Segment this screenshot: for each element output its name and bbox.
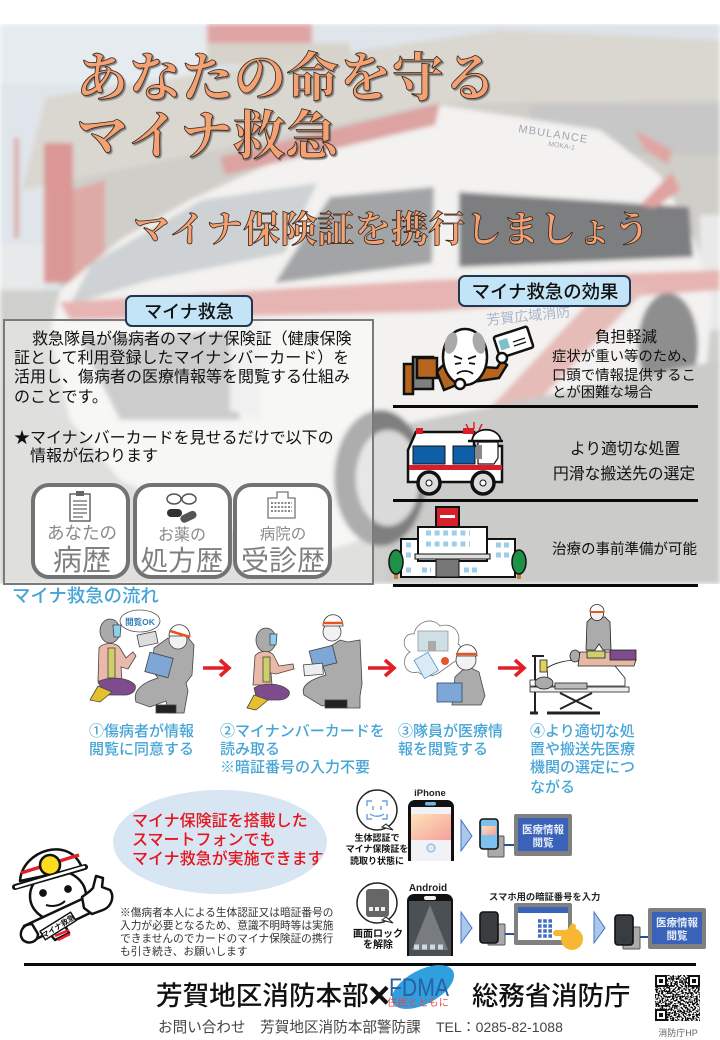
title: マイナ救急: [76, 108, 341, 166]
panel: マイナ救急: [4, 296, 373, 584]
effect 3 text: 治療の事前準備が可能: [552, 541, 697, 558]
effect 2 text: より適切な処置: [570, 440, 680, 458]
card: visit history: [235, 485, 330, 577]
caption 2: ※暗証番号の入力不要: [220, 759, 370, 776]
caption 2: [220, 723, 385, 776]
note text: も引き続き、お願いします: [120, 945, 248, 958]
caption 1: 閲覧に同意する: [89, 741, 194, 758]
description text: 救急隊員が傷病者のマイナ保険証（健康保険: [32, 329, 352, 348]
effects heading: [459, 276, 630, 306]
tablet: medical info: [648, 908, 706, 949]
biometric text: [346, 832, 408, 866]
reader and phone: [480, 819, 514, 857]
tablet: medical info: 医療情報: [656, 916, 698, 929]
chevron: [594, 912, 605, 943]
step 1 illustration: 閲覧OK: [125, 617, 156, 627]
card: prescription history: 処方歴: [141, 545, 223, 576]
effect 1 text: 症状が重い等のため、: [552, 347, 696, 365]
icon: pointing hand: [553, 923, 583, 950]
biometric text: 読取り状態に: [350, 855, 404, 866]
description text: 証として利用登録したマイナンバーカード）を: [14, 349, 349, 367]
card: medical history: 病歴: [53, 544, 111, 577]
effect 1 text: 口頭で情報提供するこ: [552, 367, 696, 384]
arrow 2: [368, 660, 394, 676]
biometric text: 生体認証で: [354, 832, 400, 843]
icon: hospital: [389, 507, 526, 579]
title: [76, 50, 497, 166]
step 3 illustration: [404, 621, 485, 705]
caption 1: ①傷病者が情報: [89, 722, 194, 740]
title: あなたの命を守る: [76, 50, 497, 108]
step 2 illustration: [247, 615, 362, 710]
note text: ※傷病者本人による生体認証又は暗証番号の: [120, 906, 333, 919]
card: medical history: [33, 485, 128, 577]
callout: smartphone notice: マイナ保険証を搭載した: [132, 812, 308, 830]
icon: ambulance with rescuer: [408, 422, 503, 494]
text: 消防庁HP: [658, 1027, 698, 1038]
icon: mascot firefighter: マイナ救急: [40, 912, 77, 940]
tablet: medical info: [514, 814, 572, 856]
logo: FDMA: 住民とともに: [387, 996, 449, 1009]
step 4 illustration: [530, 604, 636, 714]
unlock text: 画面ロック: [353, 928, 403, 940]
unlock text: [353, 928, 403, 951]
card: visit history: 病院の: [260, 525, 306, 543]
callout: smartphone notice: スマートフォンでも: [132, 831, 276, 849]
caption 1: [89, 722, 194, 758]
reader and phone: [615, 915, 648, 949]
logo: FDMA: FDMA: [389, 974, 449, 1002]
tablet: PIN entry: [514, 903, 572, 945]
photo lettering: ambulance: MOKA-1: [548, 141, 575, 152]
panel heading: [126, 296, 252, 326]
footer organisations: [156, 956, 630, 1018]
caption 2: ②マイナンバーカードを: [220, 723, 385, 740]
description text: 情報が伝わります: [30, 447, 158, 465]
effects heading: マイナ救急の効果: [472, 281, 618, 302]
footer organisations: ×: [368, 975, 390, 1017]
chevron: [461, 912, 472, 943]
panel: マイナ救急の効果: [389, 276, 698, 587]
heading: flow: マイナ救急の流れ: [12, 585, 159, 606]
card: prescription history: [135, 485, 230, 577]
panel heading: マイナ救急: [144, 302, 234, 322]
iPhone procedure: iPhone: [414, 788, 446, 799]
Android procedure: [353, 883, 706, 956]
description text: ★マイナンバーカードを見せるだけで以下の: [14, 429, 334, 447]
iPhone: [408, 800, 454, 861]
effect 1 text: 負担軽減: [595, 328, 657, 346]
caption 4: ながる: [530, 778, 575, 796]
icon: elderly patient with card: [404, 326, 534, 394]
Android procedure: スマホ用の暗証番号を入力: [489, 891, 600, 902]
step 1 illustration: [90, 610, 194, 713]
biometric text: マイナ保険証を: [346, 843, 408, 854]
contact line: お問い合わせ 芳賀地区消防本部警防課: [158, 1019, 421, 1036]
step captions: [89, 722, 635, 796]
unlock text: を解除: [363, 938, 393, 951]
arrow 3: [498, 660, 524, 676]
caption 4: 機関の選定につ: [530, 759, 635, 776]
QR code: [654, 974, 701, 1022]
caption 3: [398, 722, 503, 758]
caption 3: 報を閲覧する: [398, 741, 488, 758]
chevron: [461, 820, 472, 851]
card: visit history: 受診歴: [241, 545, 325, 576]
card: prescription history: お薬の: [158, 526, 206, 544]
callout: smartphone notice: マイナ救急が実施できます: [132, 849, 324, 868]
icon: unlock bubble: [357, 883, 397, 923]
tablet: medical info: 閲覧: [666, 929, 688, 942]
icon: mascot firefighter: [15, 849, 112, 942]
note text: [120, 906, 334, 958]
effect 2 text: 円滑な搬送先の選定: [553, 465, 695, 483]
subtitle: マイナ保険証を携行しましょう: [133, 209, 650, 251]
caption 2: 読み取る: [220, 741, 280, 758]
caption 3: ③隊員が医療情: [398, 722, 503, 740]
footer organisations: 総務省消防庁: [472, 981, 630, 1011]
description text: のことです。: [14, 388, 108, 406]
card: medical history: あなたの: [47, 523, 117, 543]
caption 4: [530, 722, 635, 796]
note text: 入力が必要となるため、意識不明時等は実施: [120, 919, 334, 932]
caption 4: ④より適切な処: [530, 722, 635, 740]
photo lettering: ambulance: MBULANCE: [518, 123, 589, 146]
note text: できませんのでカードのマイナ保険証の携行: [120, 932, 334, 945]
Android phone: [407, 894, 453, 956]
logo: FDMA: [385, 956, 461, 1018]
caption 4: 置や搬送先医療: [530, 741, 635, 758]
tablet: medical info: 医療情報: [522, 823, 564, 836]
iPhone procedure: [346, 788, 572, 866]
photo lettering: fire department: 芳賀広域消防: [486, 303, 571, 328]
description text: 活用し、傷病者の医療情報等を閲覧する仕組み: [14, 368, 350, 386]
background photo: ambulance at fire station: [0, 24, 720, 584]
effect 1 text: とが困難な場合: [552, 384, 653, 401]
description text: [14, 329, 352, 465]
tablet: medical info: 閲覧: [532, 836, 554, 849]
reader and phone: [480, 912, 514, 945]
contact line: [158, 1019, 563, 1036]
effect 2 text: [553, 440, 695, 483]
Android procedure: Android: [409, 883, 447, 894]
contact line: TEL：0285-82-1088: [436, 1019, 563, 1035]
footer organisations: 芳賀地区消防本部: [156, 981, 369, 1011]
icon: face id bubble: [357, 790, 397, 830]
effect 1 text: [552, 328, 696, 401]
arrow 1: [203, 660, 229, 676]
callout: smartphone notice: [113, 790, 327, 894]
